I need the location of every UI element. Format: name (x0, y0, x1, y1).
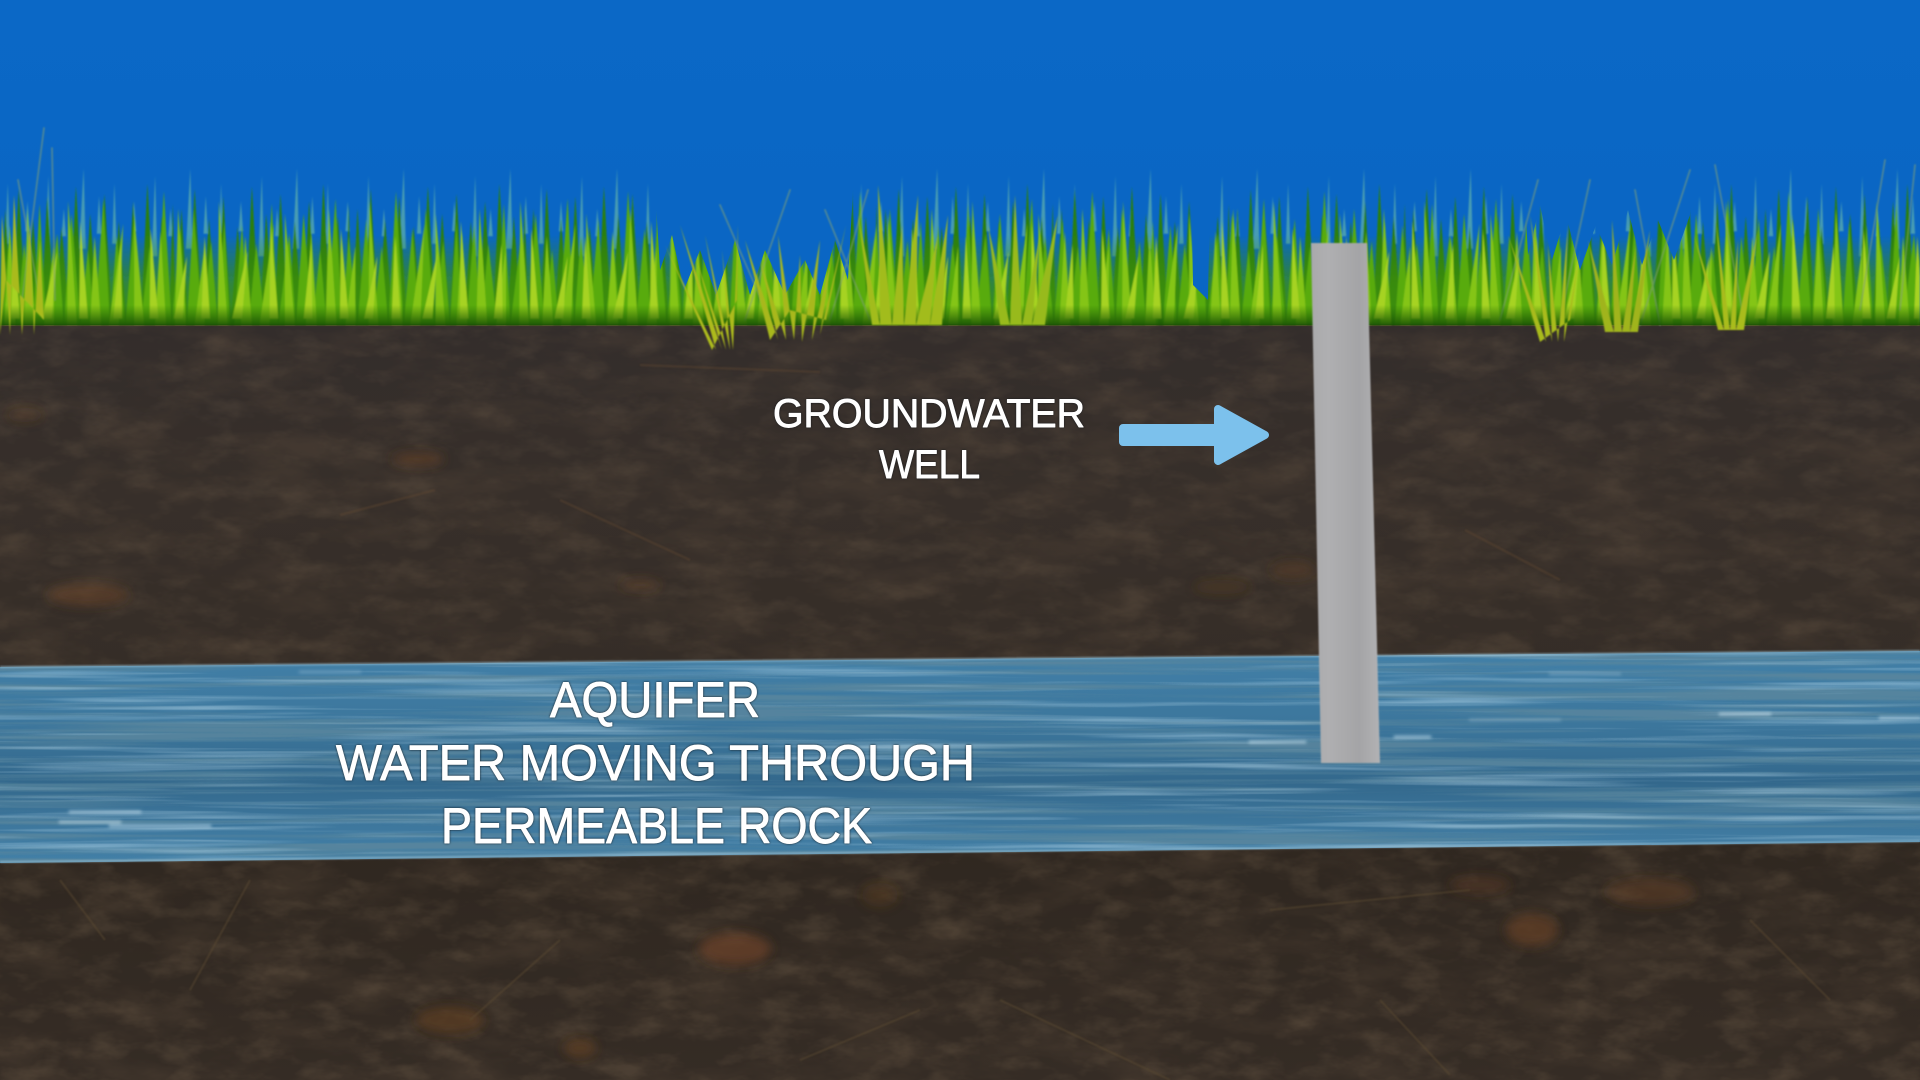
label: groundwater well (773, 392, 1085, 487)
label: groundwater well: GROUNDWATER (773, 392, 1085, 436)
lower soil layer (0, 835, 1920, 1080)
label: aquifer: PERMEABLE ROCK (441, 798, 872, 854)
yellow grass tufts (0, 185, 1758, 350)
aquifer water band (0, 651, 1920, 863)
label: aquifer (336, 672, 975, 854)
thin tall blades (18, 128, 1915, 325)
sky background (0, 0, 1920, 340)
label: groundwater well: WELL (879, 443, 980, 487)
arrow pointing to well (1123, 409, 1265, 461)
groundwater well pipe (1311, 243, 1380, 763)
upper soil layer (0, 322, 1920, 672)
grass strip (0, 128, 1920, 350)
label: aquifer: AQUIFER (550, 672, 760, 728)
label: aquifer: WATER MOVING THROUGH (336, 735, 975, 791)
